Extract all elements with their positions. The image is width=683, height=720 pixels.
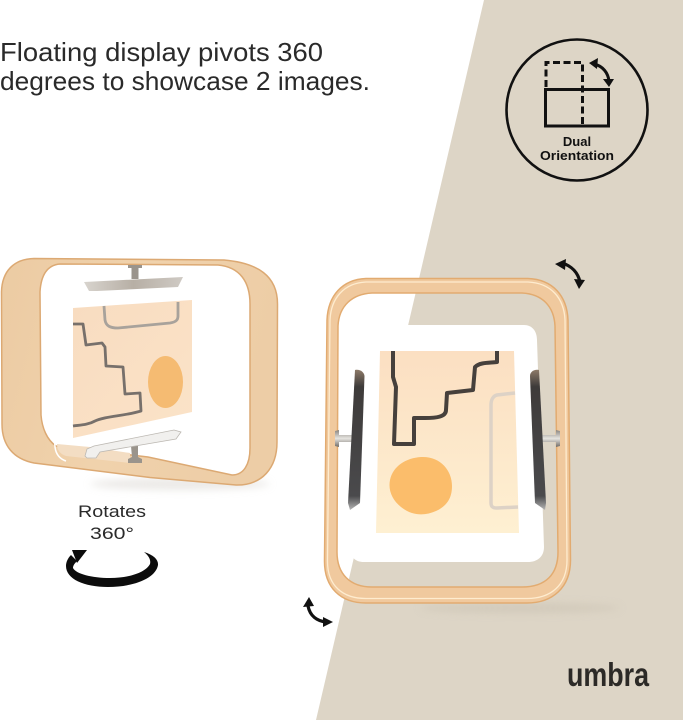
heading <box>0 37 370 96</box>
bottom pin <box>128 446 142 463</box>
stair line <box>393 351 497 444</box>
shadow under portrait frame <box>420 603 620 613</box>
pale floor seen through acrylic <box>57 444 130 463</box>
photo art <box>73 300 192 438</box>
heading: Floating display pivots 360 <box>0 37 323 67</box>
product: frame in landscape rotated view <box>2 258 278 485</box>
grey rectangle line <box>104 302 178 328</box>
icon: dual orientation badge: Dual <box>563 134 591 149</box>
shadow under landscape frame <box>90 478 270 490</box>
top bracket <box>84 277 183 291</box>
icon: dual orientation badge: Orientation <box>540 148 614 163</box>
photo art <box>376 351 519 533</box>
acrylic edge <box>54 432 66 461</box>
stair line <box>73 324 141 426</box>
beige background panel <box>316 0 683 720</box>
label: rotates 360 <box>78 502 146 543</box>
product: frame in portrait front view <box>324 278 570 603</box>
orange circle <box>389 457 452 514</box>
ring inlay <box>327 282 567 598</box>
top pin <box>128 265 142 279</box>
grey rectangle line <box>491 393 518 508</box>
orange circle <box>148 356 183 408</box>
icon: dual orientation badge <box>506 40 648 180</box>
wood frame <box>2 258 278 485</box>
arrow: bottom left pivot <box>303 597 333 627</box>
heading: degrees to showcase 2 images. <box>0 66 370 96</box>
label: rotates 360: Rotates <box>78 502 146 521</box>
bottom bracket <box>85 430 181 458</box>
right bracket <box>530 370 546 510</box>
arrow: top right pivot <box>555 259 585 289</box>
left bracket <box>348 370 364 510</box>
icon: rotation arrow <box>66 550 158 587</box>
logo: umbra: umbra <box>567 656 650 693</box>
white panel <box>350 325 544 562</box>
wood ring <box>324 278 570 603</box>
left pin <box>335 430 352 447</box>
right pin <box>542 430 560 447</box>
label: rotates 360: 360° <box>90 524 134 543</box>
